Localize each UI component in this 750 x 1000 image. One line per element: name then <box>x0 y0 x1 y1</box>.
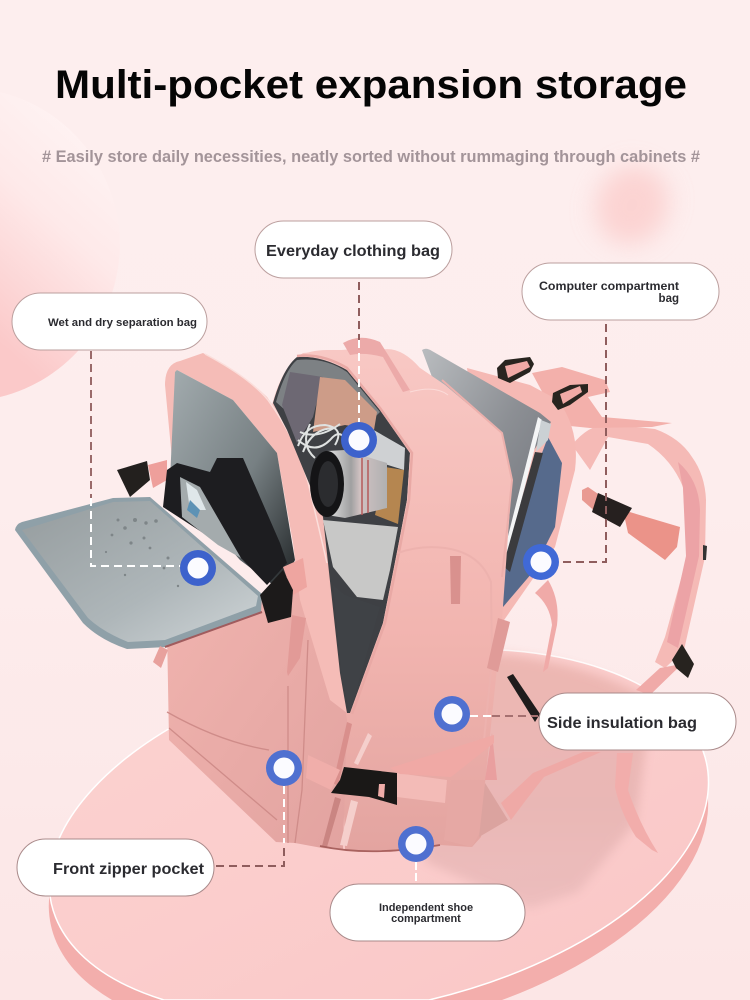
camera lens <box>310 450 387 518</box>
flap buckle <box>260 558 307 623</box>
podium <box>49 649 708 1000</box>
label: Wet and dry separation bag <box>12 293 207 350</box>
title: Multi-pocket expansion storage <box>55 63 687 107</box>
label: Computer compartment bag <box>522 263 719 320</box>
mauve lining <box>282 372 323 443</box>
black side toggle <box>507 674 540 722</box>
zipper light strip <box>340 733 372 846</box>
label: Wet and dry separation bag: Wet and dry separation bag <box>48 317 197 329</box>
bottom seam <box>320 845 440 851</box>
grey cloth <box>323 520 398 600</box>
long hanging strap <box>615 753 658 853</box>
label: Computer compartment bag: Computer compartment <box>539 281 679 293</box>
compartment top lining <box>276 360 380 420</box>
lower zipper band <box>322 797 341 847</box>
label: Computer compartment bag: bag <box>659 293 679 305</box>
top flap straps <box>532 367 672 428</box>
connector: side insulation bag <box>470 715 538 717</box>
left seams <box>167 640 308 843</box>
chest buckle <box>592 493 632 527</box>
left panel grey lining <box>170 370 295 590</box>
marker: shoe compartment <box>398 826 434 862</box>
cable bundle <box>298 424 345 458</box>
decorative blob: top right <box>582 154 682 256</box>
label: Front zipper pocket <box>17 839 214 896</box>
lower left body <box>167 590 347 850</box>
side column <box>444 780 485 847</box>
side panel <box>479 783 508 837</box>
main zipper lower <box>333 722 352 786</box>
top buckles <box>497 357 588 410</box>
label: Side insulation bag: Side insulation bag <box>547 715 697 732</box>
connector: computer compartment <box>558 324 606 562</box>
side mesh <box>485 733 497 780</box>
front buckle <box>331 767 397 805</box>
left panel piping <box>205 354 327 563</box>
buckle slot <box>378 784 385 798</box>
connector: clothing bag <box>358 282 360 424</box>
connector: wet and dry bag <box>91 351 180 566</box>
label: Side insulation bag <box>539 693 736 750</box>
label: Independent shoe compartment <box>330 884 525 941</box>
back zipper pull <box>487 618 510 672</box>
side buckle <box>117 460 167 497</box>
backpack illustration <box>15 338 707 853</box>
mesh pouch <box>163 458 287 585</box>
chest strap tail <box>623 510 680 560</box>
opening of central compartment <box>273 357 410 713</box>
tan cylinder <box>313 377 377 432</box>
compression strap <box>306 735 494 803</box>
front panel <box>297 349 512 852</box>
connector: front zipper pocket <box>216 786 284 866</box>
thin side strap <box>535 580 558 672</box>
shoulder strap <box>572 424 707 695</box>
cardboard box <box>375 467 404 524</box>
left zipper pull <box>287 615 306 676</box>
camera body <box>365 425 405 470</box>
marker: clothing bag <box>341 422 377 458</box>
grey flap <box>15 497 262 668</box>
front zipper pull <box>450 556 461 604</box>
label: Everyday clothing bag <box>255 221 452 278</box>
blue laptop lining <box>503 437 562 607</box>
decorative sphere: left <box>0 92 120 397</box>
back panel <box>467 368 576 623</box>
label: Independent shoe compartment: Independent shoe <box>379 902 473 914</box>
marker: front zipper pocket <box>266 750 302 786</box>
top handle <box>343 338 410 392</box>
mid chest strap <box>582 487 604 514</box>
diagonal lower strap <box>501 752 601 820</box>
label: Everyday clothing bag: Everyday clothing bag <box>266 243 440 260</box>
marker: computer compartment <box>523 544 559 580</box>
connector: shoe compartment <box>415 862 417 884</box>
label: Front zipper pocket: Front zipper pocket <box>53 861 205 878</box>
laptop <box>422 349 551 572</box>
centre back of body <box>272 347 512 850</box>
dark cloth <box>333 585 380 713</box>
marker: side insulation bag <box>434 696 470 732</box>
marker: wet and dry bag <box>180 550 216 586</box>
water droplets on flap <box>105 518 179 587</box>
left panel band <box>165 353 347 713</box>
subtitle: # Easily store daily necessities, neatly sorted without rummaging through cabinets # <box>42 148 700 166</box>
label: Independent shoe compartment: compartment <box>391 913 461 925</box>
